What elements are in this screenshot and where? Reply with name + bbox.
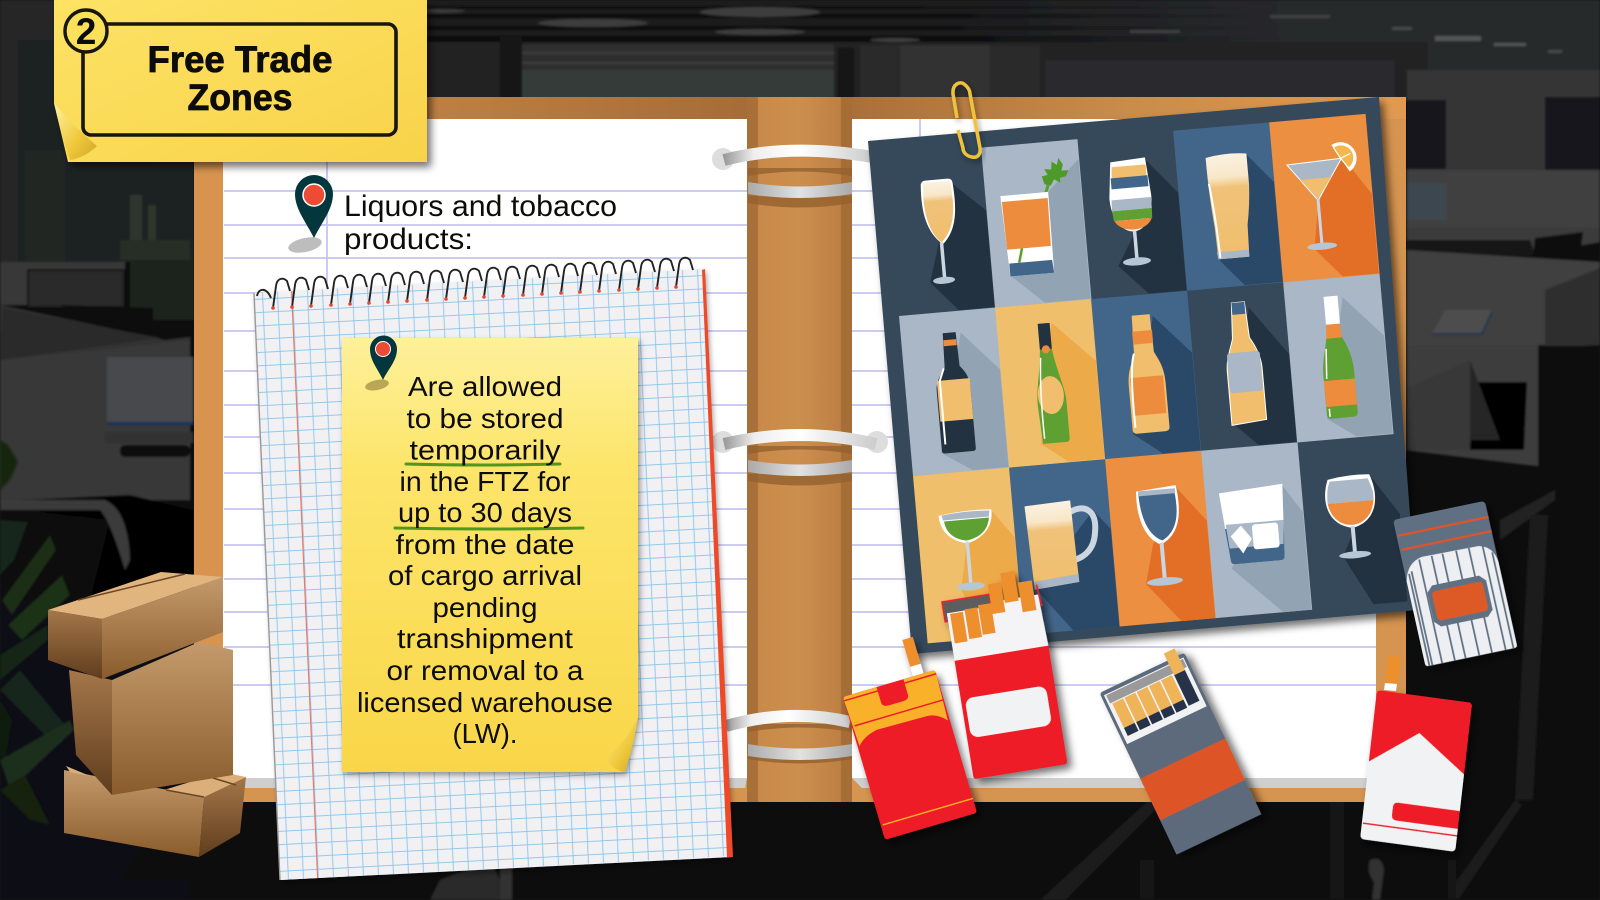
title text [148, 39, 332, 118]
cell: champagne flute [920, 176, 995, 313]
title text: Free Trade [148, 39, 332, 80]
cigarette pack: striped grey [1393, 501, 1517, 667]
drinks poster [868, 97, 1417, 654]
cell: bottle with grey label [1187, 282, 1298, 451]
binder rings [712, 148, 888, 764]
cell: layered tulip glass [1106, 155, 1187, 296]
cigarette pack: red and white [1360, 656, 1472, 852]
spiral notepad [254, 258, 733, 880]
note text: licensed warehouse [357, 687, 613, 718]
cell: coupe cocktail glass [913, 468, 1024, 643]
cell: green bottle with oval label [995, 299, 1105, 468]
title frame [83, 24, 396, 135]
note text: to be stored [406, 403, 564, 434]
yellow sticky note [342, 336, 638, 772]
cigarette pack: open red [939, 568, 1068, 780]
map pin: small [364, 336, 397, 392]
cell: beer bottle [1091, 291, 1202, 459]
note text: transhipment [397, 623, 573, 654]
note text: up to 30 days [398, 497, 572, 528]
number badge [65, 10, 107, 52]
heading: liquors and tobacco: products: [344, 223, 473, 256]
sticky curl [54, 103, 97, 160]
note text: from the date [396, 529, 574, 560]
bottom box [64, 766, 246, 857]
plant leaves [0, 440, 74, 825]
note text [357, 371, 613, 749]
binder cover [194, 97, 1406, 802]
spiral coils [257, 258, 693, 308]
highlight underlines [395, 464, 583, 529]
cell: pilsner beer glass [1173, 122, 1284, 291]
number badge: 2 [76, 11, 96, 52]
cell: brandy snifter [1323, 471, 1407, 608]
stack of cardboard boxes [48, 572, 246, 857]
note text: (LW). [452, 718, 518, 749]
cell: highball with celery [981, 139, 1091, 308]
cell: rocks glass with ice [1201, 442, 1312, 618]
heading: liquors and tobacco: Liquors and tobacco [344, 190, 617, 223]
left ruled page [223, 119, 747, 788]
map pin: large [287, 175, 333, 255]
cigarette pack: grey and orange [1096, 645, 1261, 855]
note text: or removal to a [386, 655, 584, 686]
note text: in the FTZ for [400, 466, 570, 497]
note text: pending [432, 592, 538, 623]
note text: temporarily [410, 434, 561, 466]
paper clip [953, 83, 980, 157]
note text: of cargo arrival [388, 560, 582, 591]
cell: champagne bottle [1283, 274, 1394, 443]
note curl [605, 717, 638, 772]
cell: beer mug [1009, 459, 1120, 635]
top box [48, 572, 223, 679]
cell: martini with lemon [1269, 114, 1380, 283]
title sticky note [54, 0, 427, 162]
cigarette pack: yellow and red [832, 633, 977, 840]
middle box [69, 642, 233, 795]
title text: Zones [188, 77, 292, 118]
cell: blue wine glass [1105, 451, 1216, 627]
note text: Are allowed [408, 371, 562, 402]
right ruled page [852, 119, 1376, 788]
cell: dark wine bottle [899, 308, 1009, 476]
heading: liquors and tobacco [344, 190, 617, 256]
